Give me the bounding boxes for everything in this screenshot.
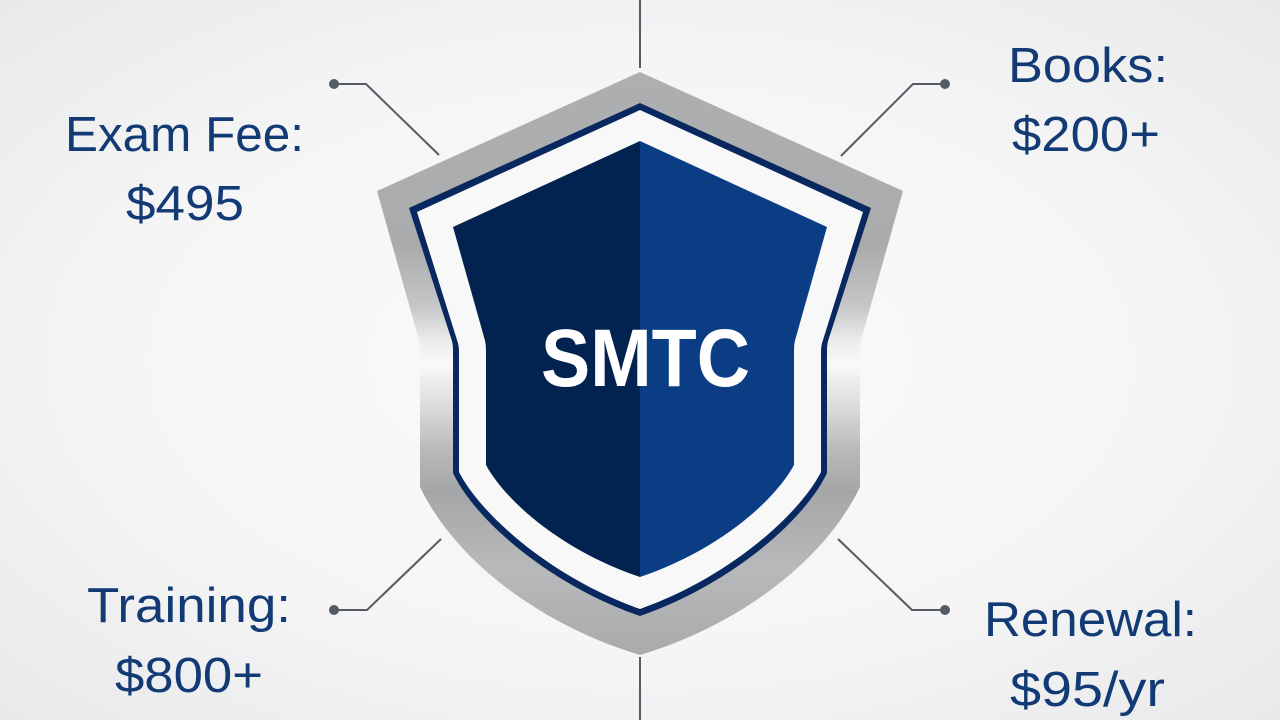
label: exam fee: Exam Fee:	[65, 108, 304, 162]
label: books	[1008, 39, 1168, 162]
shield emblem	[377, 72, 903, 655]
label: exam fee: $495	[126, 177, 244, 231]
shield: white band	[417, 110, 863, 609]
label: renewal: $95/yr	[1010, 663, 1165, 717]
shield: metal rim	[377, 72, 903, 655]
label: training	[87, 579, 291, 703]
label: exam fee	[65, 108, 304, 231]
shield: dark left half	[453, 141, 640, 577]
connector: books	[841, 80, 949, 156]
shield label: SMTC	[541, 313, 750, 404]
label: books: Books:	[1008, 39, 1168, 93]
connector: training	[330, 539, 441, 614]
connector: top	[639, 0, 641, 68]
label: training: Training:	[87, 579, 291, 633]
connector: bottom	[639, 657, 641, 720]
shield: navy outline	[409, 103, 871, 616]
connector: renewal	[838, 539, 949, 614]
label: training: $800+	[115, 649, 263, 703]
connector: exam fee	[330, 80, 439, 155]
label: renewal: Renewal:	[984, 593, 1197, 647]
label: books: $200+	[1012, 108, 1160, 162]
shield: blue right half	[640, 141, 827, 577]
label: renewal	[984, 593, 1197, 717]
